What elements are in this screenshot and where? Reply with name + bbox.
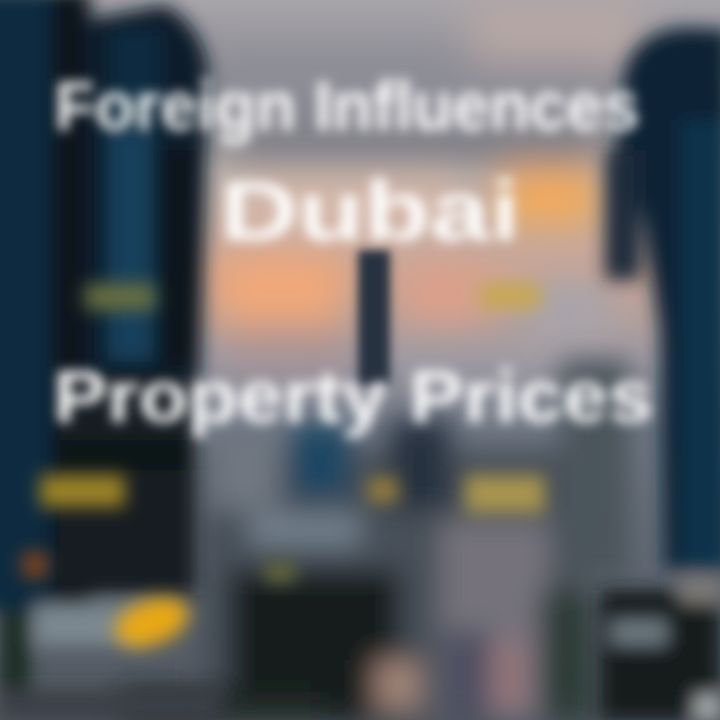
city streets and lower district [120,360,630,720]
title line: foreign influences: Foreign Influences [54,67,640,145]
title line: property prices: Property Prices [53,355,653,438]
right tower [600,28,720,720]
title [53,67,653,438]
title line: on Dubai: Dubai [220,164,520,258]
glowing lights [22,284,545,656]
central tower silhouette [358,250,390,385]
left towers [0,0,220,720]
